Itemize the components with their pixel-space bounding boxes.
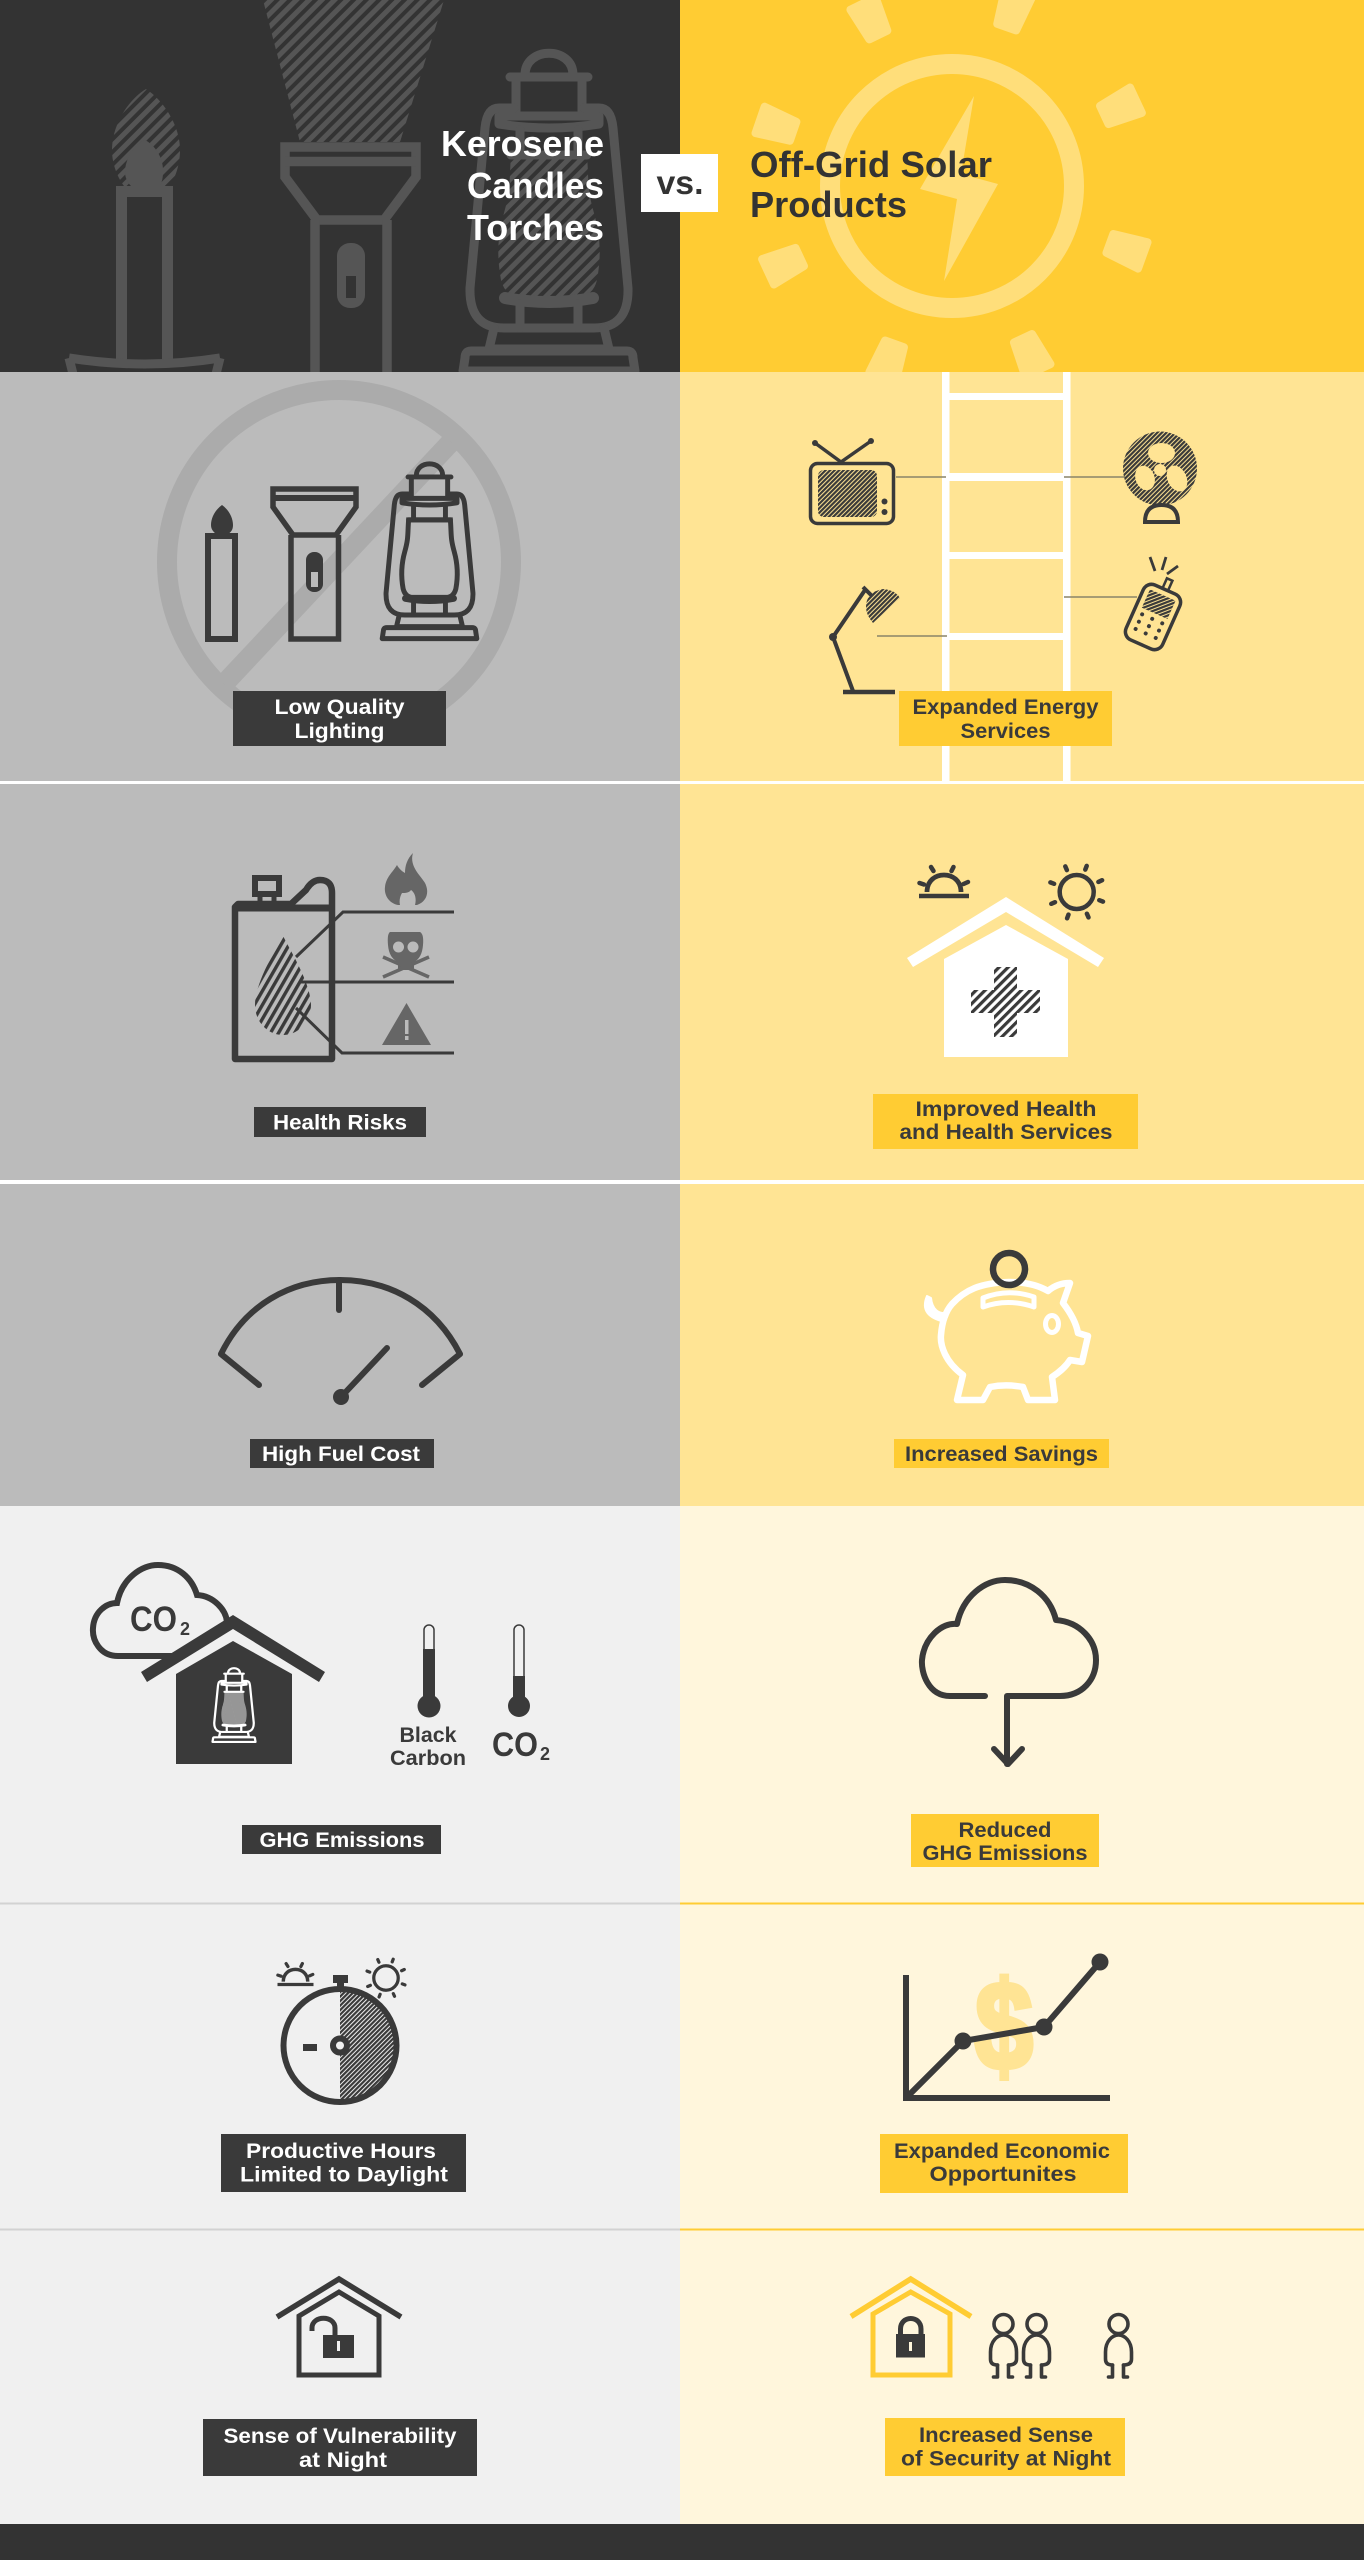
- label: reduced ghg emissions: Reduced: [958, 1819, 1052, 1842]
- label: sense of vulnerability at night: at Night: [299, 2449, 387, 2472]
- icon: desk lamp: [829, 587, 900, 692]
- panel: sense of vulnerability: [0, 2228, 680, 2524]
- panel: header left: [0, 0, 680, 380]
- vs badge: vs.: [656, 164, 704, 201]
- footer band: [0, 2524, 1364, 2560]
- label: reduced ghg emissions: [911, 1814, 1099, 1867]
- label: low quality lighting: Low Quality: [274, 696, 405, 719]
- label: sense of vulnerability at night: Sense of Vulnerability: [224, 2425, 457, 2448]
- label: increased savings: [894, 1439, 1109, 1468]
- ladder: [942, 372, 1070, 781]
- icon: single person: [1106, 2314, 1132, 2377]
- label: reduced ghg emissions: GHG Emissions: [922, 1842, 1088, 1865]
- title: kerosene candles torches: Kerosene: [441, 123, 604, 164]
- label: improved health and health services: Improved Health: [916, 1098, 1096, 1121]
- label: productive hours limited to daylight: Limited to Daylight: [240, 2164, 448, 2186]
- icon: co2 cloud over house: [93, 1565, 325, 1764]
- icon: sun with lightning bolt: [756, 0, 1148, 382]
- icon: co2 cloud over house: CO: [130, 1600, 177, 1639]
- label: increased savings: Increased Savings: [905, 1443, 1098, 1466]
- icon: fuel gauge: [221, 1280, 460, 1405]
- panel: productive hours limited to daylight: [0, 1902, 680, 2229]
- panel: expanded economic opportunities: [680, 1902, 1364, 2229]
- title: kerosene candles torches: Torches: [467, 207, 604, 248]
- icon: ghost flashlight: [263, 0, 444, 380]
- icon: pair of people: [990, 2314, 1050, 2377]
- label: health risks: Health Risks: [273, 1112, 407, 1134]
- icon: black carbon thermometer: Black: [400, 1724, 457, 1747]
- panel: ghg emissions: [0, 1506, 680, 1903]
- label: expanded economic opportunities: [880, 2134, 1128, 2193]
- label: low quality lighting: [233, 691, 446, 746]
- icon: growth chart with dollar: $: [975, 1957, 1033, 2096]
- panel: improved health: [680, 784, 1364, 1180]
- title: kerosene candles torches: Candles: [467, 165, 604, 206]
- icon: fuel can with risk lines: [235, 878, 454, 1059]
- title: off-grid solar products: Products: [750, 184, 907, 225]
- icon: lantern: [382, 464, 477, 639]
- icon: candle: [208, 505, 235, 639]
- label: high fuel cost: High Fuel Cost: [262, 1443, 420, 1466]
- icon: clinic house: [907, 897, 1104, 1057]
- label: productive hours limited to daylight: [221, 2134, 466, 2192]
- icon: black carbon thermometer: Carbon: [390, 1747, 466, 1770]
- panel: increased savings: [680, 1184, 1364, 1506]
- icon: stopwatch half shaded: [284, 1975, 396, 2102]
- icon: ghost lantern: [463, 53, 635, 371]
- title: kerosene candles torches: [441, 123, 604, 248]
- panel: increased sense of security: [680, 2228, 1364, 2524]
- label: health risks: [254, 1107, 426, 1137]
- icon: cloud with down arrow: [922, 1580, 1096, 1764]
- label: expanded energy services: Services: [960, 720, 1050, 743]
- icon: co2 thermometer: 2: [540, 1744, 550, 1764]
- icon: television: [810, 438, 1137, 636]
- label: sense of vulnerability at night: [203, 2419, 477, 2476]
- label: improved health and health services: and Health Services: [900, 1121, 1112, 1144]
- icon: prohibition sign: [167, 390, 511, 734]
- panel: expanded energy services: [680, 372, 1364, 781]
- label: increased sense of security at night: [885, 2418, 1125, 2476]
- icon: flashlight: [273, 489, 356, 639]
- icon: mobile phone: [1123, 557, 1188, 653]
- label: low quality lighting: Lighting: [294, 720, 384, 743]
- icon: co2 thermometer: CO: [492, 1726, 538, 1764]
- icon: growth chart with dollar: [906, 1954, 1110, 2098]
- label: high fuel cost: [250, 1439, 434, 1468]
- panel: header right: [680, 0, 1364, 382]
- label: ghg emissions: GHG Emissions: [260, 1829, 424, 1852]
- label: improved health and health services: [873, 1094, 1138, 1149]
- icon: piggy bank with coin: [925, 1253, 1088, 1400]
- panel: health risks: [0, 784, 680, 1180]
- panel: low quality lighting: [0, 372, 680, 781]
- icon: co2 thermometer: [492, 1625, 550, 1764]
- icon: sun: [1050, 866, 1103, 918]
- panel: high fuel cost: [0, 1184, 680, 1506]
- label: increased sense of security at night: of Security at Night: [901, 2448, 1111, 2470]
- vs badge: [641, 154, 718, 212]
- icon: house with open lock: [277, 2279, 401, 2375]
- label: productive hours limited to daylight: Productive Hours: [246, 2140, 436, 2163]
- icon: skull and crossbones: [383, 932, 429, 977]
- label: expanded economic opportunities: Opportunites: [930, 2163, 1076, 2186]
- label: expanded economic opportunities: Expanded Economic: [894, 2140, 1110, 2163]
- title: off-grid solar products: [750, 144, 992, 225]
- label: ghg emissions: [242, 1825, 441, 1854]
- icon: flame: [385, 853, 427, 905]
- label: expanded energy services: Expanded Energy: [912, 696, 1099, 719]
- icon: warning triangle: [382, 1003, 431, 1045]
- title: off-grid solar products: Off-Grid Solar: [750, 144, 992, 185]
- icon: house with closed lock: [851, 2279, 971, 2375]
- icon: ghost candle: [69, 89, 220, 378]
- icon: sunrise: [919, 867, 969, 896]
- label: expanded energy services: [899, 691, 1112, 746]
- icon: sun small: [367, 1959, 405, 1997]
- icon: co2 cloud over house: 2: [180, 1619, 190, 1639]
- icon: black carbon thermometer: [390, 1625, 466, 1770]
- icon: sunrise small: [278, 1964, 314, 1984]
- icon: lantern inside house: [212, 1668, 256, 1742]
- icon: fan: [1123, 432, 1197, 522]
- label: increased sense of security at night: Increased Sense: [919, 2424, 1093, 2447]
- panel: reduced ghg emissions: [680, 1506, 1364, 1903]
